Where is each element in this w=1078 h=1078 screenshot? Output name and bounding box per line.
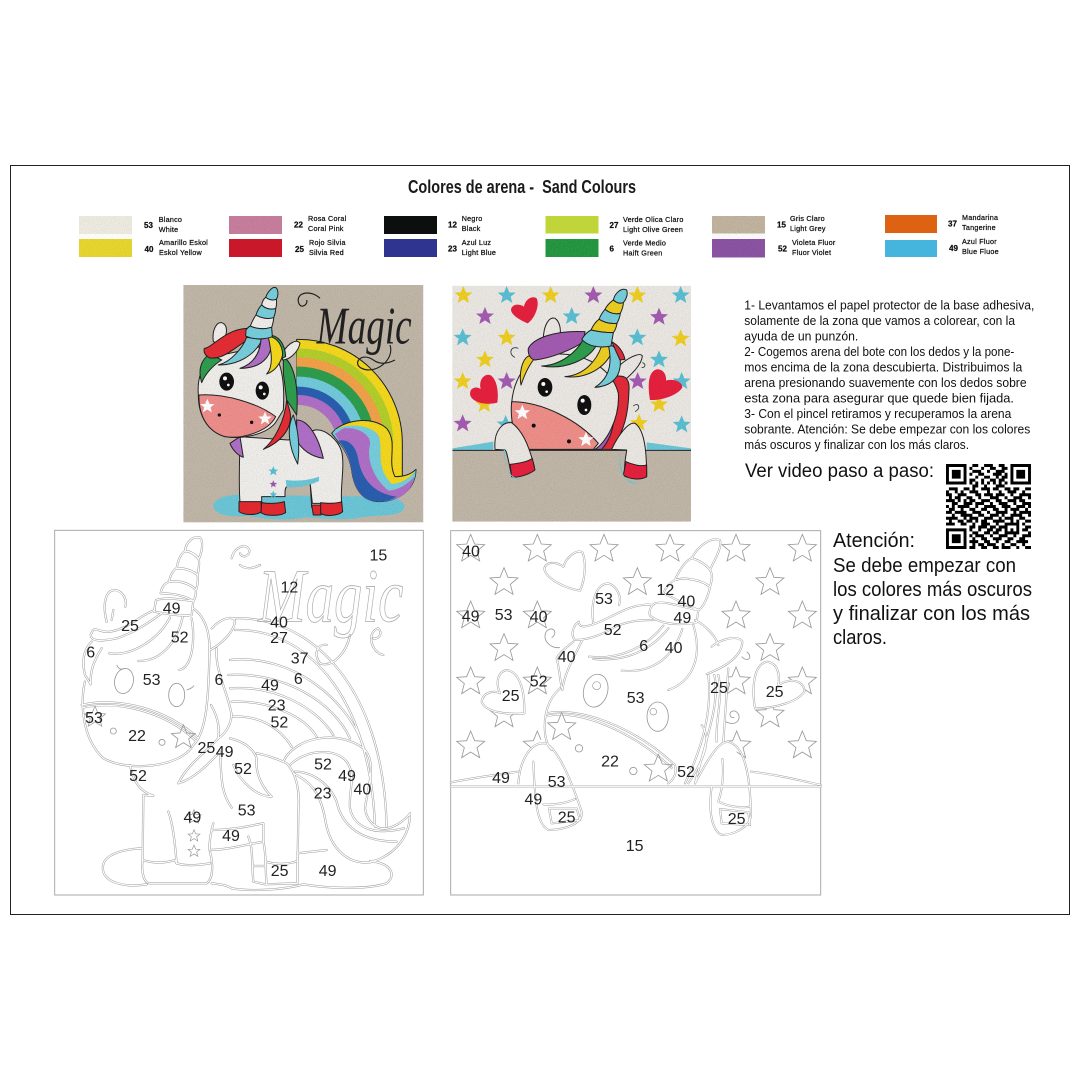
colour names: Rojo Silvia bbox=[309, 238, 346, 247]
colour numbers: 49 bbox=[319, 863, 337, 880]
instructions text: solamente de la zona que vamos a colorear, con la bbox=[744, 313, 1016, 328]
colour numbers: 49 bbox=[492, 770, 510, 787]
colour numbers: 23 bbox=[314, 785, 332, 802]
colour names: Verde Olica Claro bbox=[623, 215, 684, 224]
tail bbox=[332, 420, 416, 502]
stars bbox=[454, 286, 691, 432]
horn bbox=[582, 289, 627, 347]
swatches bbox=[79, 215, 937, 258]
colour numbers: 52 bbox=[314, 756, 332, 773]
colour numbers: 53 bbox=[595, 591, 613, 608]
colour numbers: 53 bbox=[548, 774, 566, 791]
colour numbers: 25 bbox=[766, 684, 784, 701]
video label: Ver video paso a paso: bbox=[745, 461, 934, 482]
horn bbox=[246, 287, 278, 339]
instructions text: 1- Levantamos el papel protector de la base adhesiva, bbox=[744, 297, 1034, 312]
colour names: Light Grey bbox=[790, 224, 826, 233]
picture: finished peeking unicorn with stars and hearts bbox=[452, 286, 691, 522]
colour numbers: 25 bbox=[197, 740, 215, 757]
lettering: Magic: Magic bbox=[316, 295, 412, 355]
eyes and nose bbox=[200, 373, 272, 424]
instructions text: 3- Con el pincel retiramos y recuperamos la arena bbox=[744, 406, 1012, 421]
colour names: White bbox=[159, 225, 178, 234]
colour numbers: 27 bbox=[270, 630, 288, 647]
colour numbers: 49 bbox=[216, 744, 234, 761]
attention note: los colores más oscuros bbox=[833, 579, 1032, 601]
colour names: Violeta Fluor bbox=[792, 238, 836, 247]
colour names: Azul Luz bbox=[462, 238, 491, 247]
colour numbers: 12 bbox=[448, 220, 457, 230]
instructions text: arena presionando suavemente con los dedos sobre bbox=[744, 375, 1027, 390]
attention note: Atención: bbox=[833, 530, 915, 552]
colour numbers: 52 bbox=[778, 244, 787, 254]
colour numbers: 22 bbox=[128, 728, 146, 745]
instructions text: mos encima de la zona descubierta. Distribuimos la bbox=[744, 359, 1023, 374]
colour names bbox=[159, 213, 999, 257]
hearts bbox=[470, 297, 682, 404]
colour numbers: 25 bbox=[710, 680, 728, 697]
colour numbers: 53 bbox=[238, 802, 256, 819]
colour names: Silvia Red bbox=[309, 248, 344, 257]
colour names: Light Olive Green bbox=[623, 225, 683, 234]
colour numbers: 52 bbox=[234, 761, 252, 778]
colour numbers: 49 bbox=[261, 678, 279, 695]
colour names: Gris Claro bbox=[790, 214, 825, 223]
colour names: Rosa Coral bbox=[308, 214, 347, 223]
colour numbers: 40 bbox=[353, 781, 371, 798]
panel: numbered outline, peeking unicorn bbox=[451, 531, 821, 895]
colour numbers: 49 bbox=[163, 601, 181, 618]
leg stars bbox=[268, 466, 278, 498]
colour numbers: 52 bbox=[604, 622, 622, 639]
colour numbers: 12 bbox=[280, 579, 298, 596]
colour numbers: 15 bbox=[626, 838, 644, 855]
colour names: Amarillo Eskol bbox=[159, 238, 208, 247]
body bbox=[230, 357, 343, 515]
colour numbers: 6 bbox=[86, 645, 95, 662]
colour numbers: 53 bbox=[143, 672, 161, 689]
unicorn bbox=[495, 289, 647, 484]
colour numbers: 15 bbox=[369, 548, 387, 565]
colour numbers: 15 bbox=[777, 220, 786, 230]
colour numbers: 49 bbox=[673, 610, 691, 627]
colour names: Light Blue bbox=[462, 248, 496, 257]
colour numbers: 40 bbox=[144, 245, 154, 254]
floor bbox=[452, 442, 691, 522]
colour numbers: 40 bbox=[665, 640, 683, 657]
instructions text: más oscuros y finalizar con los más claros. bbox=[744, 437, 969, 452]
colour numbers: 40 bbox=[677, 594, 695, 611]
QR code bbox=[945, 463, 1032, 550]
colour numbers: 22 bbox=[601, 753, 619, 770]
colour numbers: 40 bbox=[530, 609, 548, 626]
colour numbers: 23 bbox=[268, 697, 286, 714]
attention note: Se debe empezar con bbox=[833, 555, 1016, 577]
colour names: Fluor Violet bbox=[792, 248, 831, 257]
colour numbers: 25 bbox=[558, 809, 576, 826]
colour numbers: 6 bbox=[215, 672, 224, 689]
colour numbers: 6 bbox=[294, 671, 303, 688]
attention note: claros. bbox=[833, 627, 887, 649]
colour numbers: 40 bbox=[270, 615, 288, 632]
colour numbers: 22 bbox=[294, 220, 303, 230]
colour names: Negro bbox=[462, 214, 483, 223]
colour numbers: 23 bbox=[448, 244, 457, 254]
instructions text: ayuda de un punzón. bbox=[744, 328, 858, 343]
colour numbers: 25 bbox=[728, 811, 746, 828]
colour names: Haift Green bbox=[623, 248, 663, 257]
colour numbers: 49 bbox=[462, 609, 480, 626]
instructions text: esta zona para asegurar que quede bien fijada. bbox=[744, 390, 1014, 405]
colour numbers: 52 bbox=[677, 764, 695, 781]
attention note: y finalizar con los más bbox=[833, 603, 1030, 625]
page frame bbox=[10, 166, 1070, 914]
panel: numbered outline, standing unicorn bbox=[55, 530, 423, 895]
colour numbers: 40 bbox=[462, 544, 480, 561]
colour numbers bbox=[144, 220, 958, 254]
colour numbers: 49 bbox=[524, 791, 542, 808]
instructions text bbox=[744, 297, 1034, 452]
colour numbers: 37 bbox=[948, 220, 957, 228]
colour names: Blue Fluoe bbox=[962, 247, 999, 256]
head bbox=[198, 323, 300, 449]
colour numbers: 25 bbox=[295, 245, 304, 254]
attention note bbox=[833, 530, 1032, 649]
eyes and details bbox=[511, 348, 645, 446]
instructions text: sobrante. Atención: Se debe empezar con los colores bbox=[744, 421, 1030, 436]
title: Colores de arena - Sand Colours bbox=[408, 176, 636, 197]
colour numbers: 53 bbox=[85, 710, 103, 727]
colour numbers: 49 bbox=[338, 768, 356, 785]
rainbow bbox=[297, 339, 402, 477]
instructions text: 2- Cogemos arena del bote con los dedos y la pone- bbox=[744, 344, 1014, 359]
colour names: Coral Pink bbox=[308, 224, 344, 233]
outline stars bbox=[457, 534, 816, 758]
picture: finished standing unicorn with rainbow bbox=[183, 285, 424, 523]
colour numbers: 25 bbox=[121, 618, 139, 635]
colour numbers: 52 bbox=[270, 715, 288, 732]
colour numbers: 49 bbox=[949, 244, 958, 253]
legend: sand colours bbox=[79, 213, 999, 258]
colour numbers: 37 bbox=[291, 651, 309, 668]
colour names: Tangerine bbox=[962, 223, 996, 232]
colour numbers bbox=[462, 544, 784, 855]
colour names: Azul Fluor bbox=[962, 237, 997, 246]
colour numbers: 6 bbox=[639, 638, 648, 655]
colour names: Eskol Yellow bbox=[159, 248, 203, 257]
colour numbers: 53 bbox=[495, 607, 513, 624]
colour numbers: 52 bbox=[171, 629, 189, 646]
colour numbers: 49 bbox=[183, 809, 201, 826]
colour numbers: 53 bbox=[627, 690, 645, 707]
colour numbers: 53 bbox=[144, 221, 153, 230]
colour numbers: 25 bbox=[502, 688, 520, 705]
colour numbers: 25 bbox=[271, 863, 289, 880]
colour names: Black bbox=[462, 224, 481, 233]
colour names: Verde Medio bbox=[623, 238, 666, 247]
colour numbers: 49 bbox=[222, 828, 240, 845]
lettering: Magic bbox=[298, 293, 412, 370]
colour numbers: 52 bbox=[129, 768, 147, 785]
outline drawing bbox=[451, 538, 821, 835]
colour numbers: 12 bbox=[656, 582, 674, 599]
outline drawing bbox=[82, 537, 410, 890]
colour numbers: 6 bbox=[610, 244, 614, 254]
colour numbers: 27 bbox=[610, 221, 619, 230]
colour names: Blanco bbox=[159, 215, 182, 224]
colour numbers: 40 bbox=[558, 649, 576, 666]
colour numbers bbox=[85, 548, 387, 880]
colour numbers: 52 bbox=[530, 674, 548, 691]
colour names: Mandarina bbox=[962, 213, 998, 222]
outline drawing: Magic bbox=[258, 554, 403, 639]
